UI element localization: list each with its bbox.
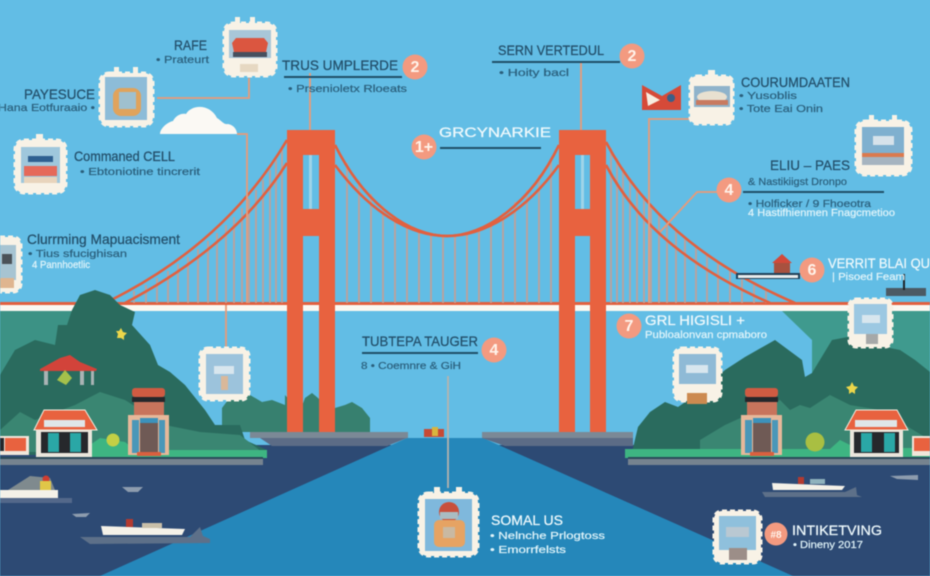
icon: left edge xyxy=(0,237,21,292)
lighter trees right xyxy=(700,395,930,455)
callout: VERRIT BLAI QU xyxy=(800,255,930,283)
suspender cables xyxy=(134,148,766,303)
callout: SERN VERTEDUL xyxy=(492,42,644,79)
callout: COURUMDAATEN xyxy=(739,74,850,115)
callout: INTIKETVING: #8 xyxy=(770,530,782,541)
icon: Commanded CELL xyxy=(15,134,66,193)
callout: PAYESUCE: PAYESUCE xyxy=(24,86,95,102)
main cables xyxy=(105,140,795,303)
right bridge tower xyxy=(559,130,606,432)
callout: ELIU PAES xyxy=(716,157,895,219)
icon: right lower xyxy=(674,348,721,404)
callout: COURUMDAATEN: • Tote Eai Onin xyxy=(739,103,823,115)
red van left xyxy=(0,436,29,455)
callout: COURUMDAATEN: • Yusoblis xyxy=(739,90,797,102)
small vessel near right icon xyxy=(886,274,926,296)
red van right xyxy=(912,436,930,456)
callout: GRL HIGISLI: GRL HIGISLI + xyxy=(645,312,745,328)
star left xyxy=(116,328,127,340)
icon: lower left hanging xyxy=(200,348,249,400)
callout: PAYESUCE: Hana Eotfuraaio • xyxy=(0,102,95,114)
red banner xyxy=(642,85,681,110)
callout: INTIKETVING: INTIKETVING xyxy=(792,522,882,538)
callout: ELIU PAES: 4 Hastifhienmen Fnagcmetioo xyxy=(748,207,895,219)
callout: GRL HIGISLI: Publoalonvan cpmaboro xyxy=(645,329,767,341)
teal hillside backdrop right xyxy=(782,311,930,390)
callout: TUBTEPA TAUGER: TUBTEPA TAUGER xyxy=(362,333,478,349)
callout: SOMAL US: • Emorrfelsts xyxy=(490,544,566,556)
callout: SOMAL US xyxy=(490,512,605,556)
distant trees behind left tower xyxy=(222,393,370,432)
callout: PAYESUCE xyxy=(0,86,95,114)
right ground xyxy=(625,440,930,458)
callout: VERRIT BLAI QU: 6 xyxy=(808,262,817,279)
sky background xyxy=(0,0,930,440)
lighter trees left xyxy=(0,392,262,452)
boat 1 xyxy=(0,476,72,503)
callout: Clurrming Mapuacisment: 4 Pannhoetlic xyxy=(32,259,90,271)
ship on right deck xyxy=(736,254,800,279)
callout: GRL HIGISLI xyxy=(616,312,767,341)
callout: GRCYNARKIE: GRCYNARKIE xyxy=(439,124,551,140)
callout: ELIU PAES: ELIU – PAES xyxy=(770,157,850,173)
callout: INTIKETVING: • Dineny 2017 xyxy=(793,539,863,551)
icon: COURUMDAATEN xyxy=(690,70,733,124)
callout: SERN VERTEDUL: • Hoity bacl xyxy=(499,67,569,79)
callout: TRUS UMPLERDE xyxy=(282,57,407,95)
navy water xyxy=(0,445,930,576)
connector lines xyxy=(157,62,718,488)
yellow marker left xyxy=(106,434,120,446)
boat 3 xyxy=(762,477,862,497)
number badge 2 left: 2 xyxy=(411,59,420,76)
callout: GRL HIGISLI: 7 xyxy=(625,318,634,335)
callout: RAFE: • Prateurt xyxy=(156,54,209,66)
callout: TRUS UMPLERDE: TRUS UMPLERDE xyxy=(282,57,398,73)
house right xyxy=(845,410,908,457)
callout: TUBTEPA TAUGER xyxy=(361,333,506,372)
callout: Commaned CELL xyxy=(74,148,200,178)
callout: ELIU PAES: 4 xyxy=(725,182,734,199)
callout: TUBTEPA TAUGER: 4 xyxy=(490,342,499,359)
icon: RAFE xyxy=(224,17,276,76)
callout: SERN VERTEDUL: SERN VERTEDUL xyxy=(498,42,604,58)
callout: RAFE: RAFE xyxy=(174,37,207,53)
callout: Clurrming Mapuacisment: Clurrming Mapuacisment xyxy=(27,231,180,247)
ornate building left xyxy=(128,388,169,456)
callout: SERN VERTEDUL: 2 xyxy=(628,48,637,65)
small skiffs xyxy=(72,475,918,517)
callout: VERRIT BLAI QU: | Pisoed Feam xyxy=(832,271,905,283)
pavilion left xyxy=(40,355,97,385)
callout: ELIU PAES: • Holficker / 9 Fhoeotra xyxy=(748,198,871,210)
callout: INTIKETVING xyxy=(764,522,882,551)
right quay xyxy=(628,457,930,465)
cloud xyxy=(160,107,237,134)
yellow marker right xyxy=(806,432,824,452)
callout: ELIU PAES: & Nastikiigst Dronpo xyxy=(748,176,847,188)
callout: Clurrming Mapuacisment xyxy=(27,231,180,271)
icon: ELIU PAES xyxy=(856,115,911,175)
callout: GRCYNARKIE xyxy=(412,124,551,160)
bridge deck xyxy=(0,302,930,311)
left ground xyxy=(90,438,267,458)
teal hillside backdrop left xyxy=(0,311,76,391)
callout: GRCYNARKIE: 1+ xyxy=(415,139,433,156)
callout: TRUS UMPLERDE: • Prsenioletx Rloeats xyxy=(288,83,407,95)
central blue water channel xyxy=(100,438,793,576)
callout: Commaned CELL: • Ebtoniotine tincrerit xyxy=(80,166,200,178)
icon: SOMAL US xyxy=(419,487,478,556)
number badge 2 left xyxy=(402,54,428,80)
callout: Clurrming Mapuacisment: • Tius sfucighisan xyxy=(28,248,127,260)
icon: right deck hanging xyxy=(849,299,892,347)
callout: COURUMDAATEN: COURUMDAATEN xyxy=(741,74,850,90)
left bridge tower xyxy=(287,130,335,432)
house left xyxy=(34,410,97,457)
far boats on channel xyxy=(424,427,444,437)
right pier xyxy=(482,432,633,446)
boat 2 xyxy=(80,519,210,544)
callout: RAFE xyxy=(156,37,209,66)
left quay xyxy=(0,457,263,465)
right forest xyxy=(632,335,930,455)
icon: INTIKETVING xyxy=(714,511,761,563)
callout: SOMAL US: SOMAL US xyxy=(491,512,563,528)
left pier xyxy=(250,432,408,446)
callout: SOMAL US: • Nelnche Prlogtoss xyxy=(490,530,605,542)
callout: Commaned CELL: Commaned CELL xyxy=(74,148,175,164)
left forest xyxy=(0,290,267,455)
callout: TUBTEPA TAUGER: 8 • Coemnre & GiH xyxy=(361,360,461,372)
ornate building right xyxy=(741,388,782,456)
star right xyxy=(846,382,858,394)
icon: PAYESUCE xyxy=(100,67,153,126)
